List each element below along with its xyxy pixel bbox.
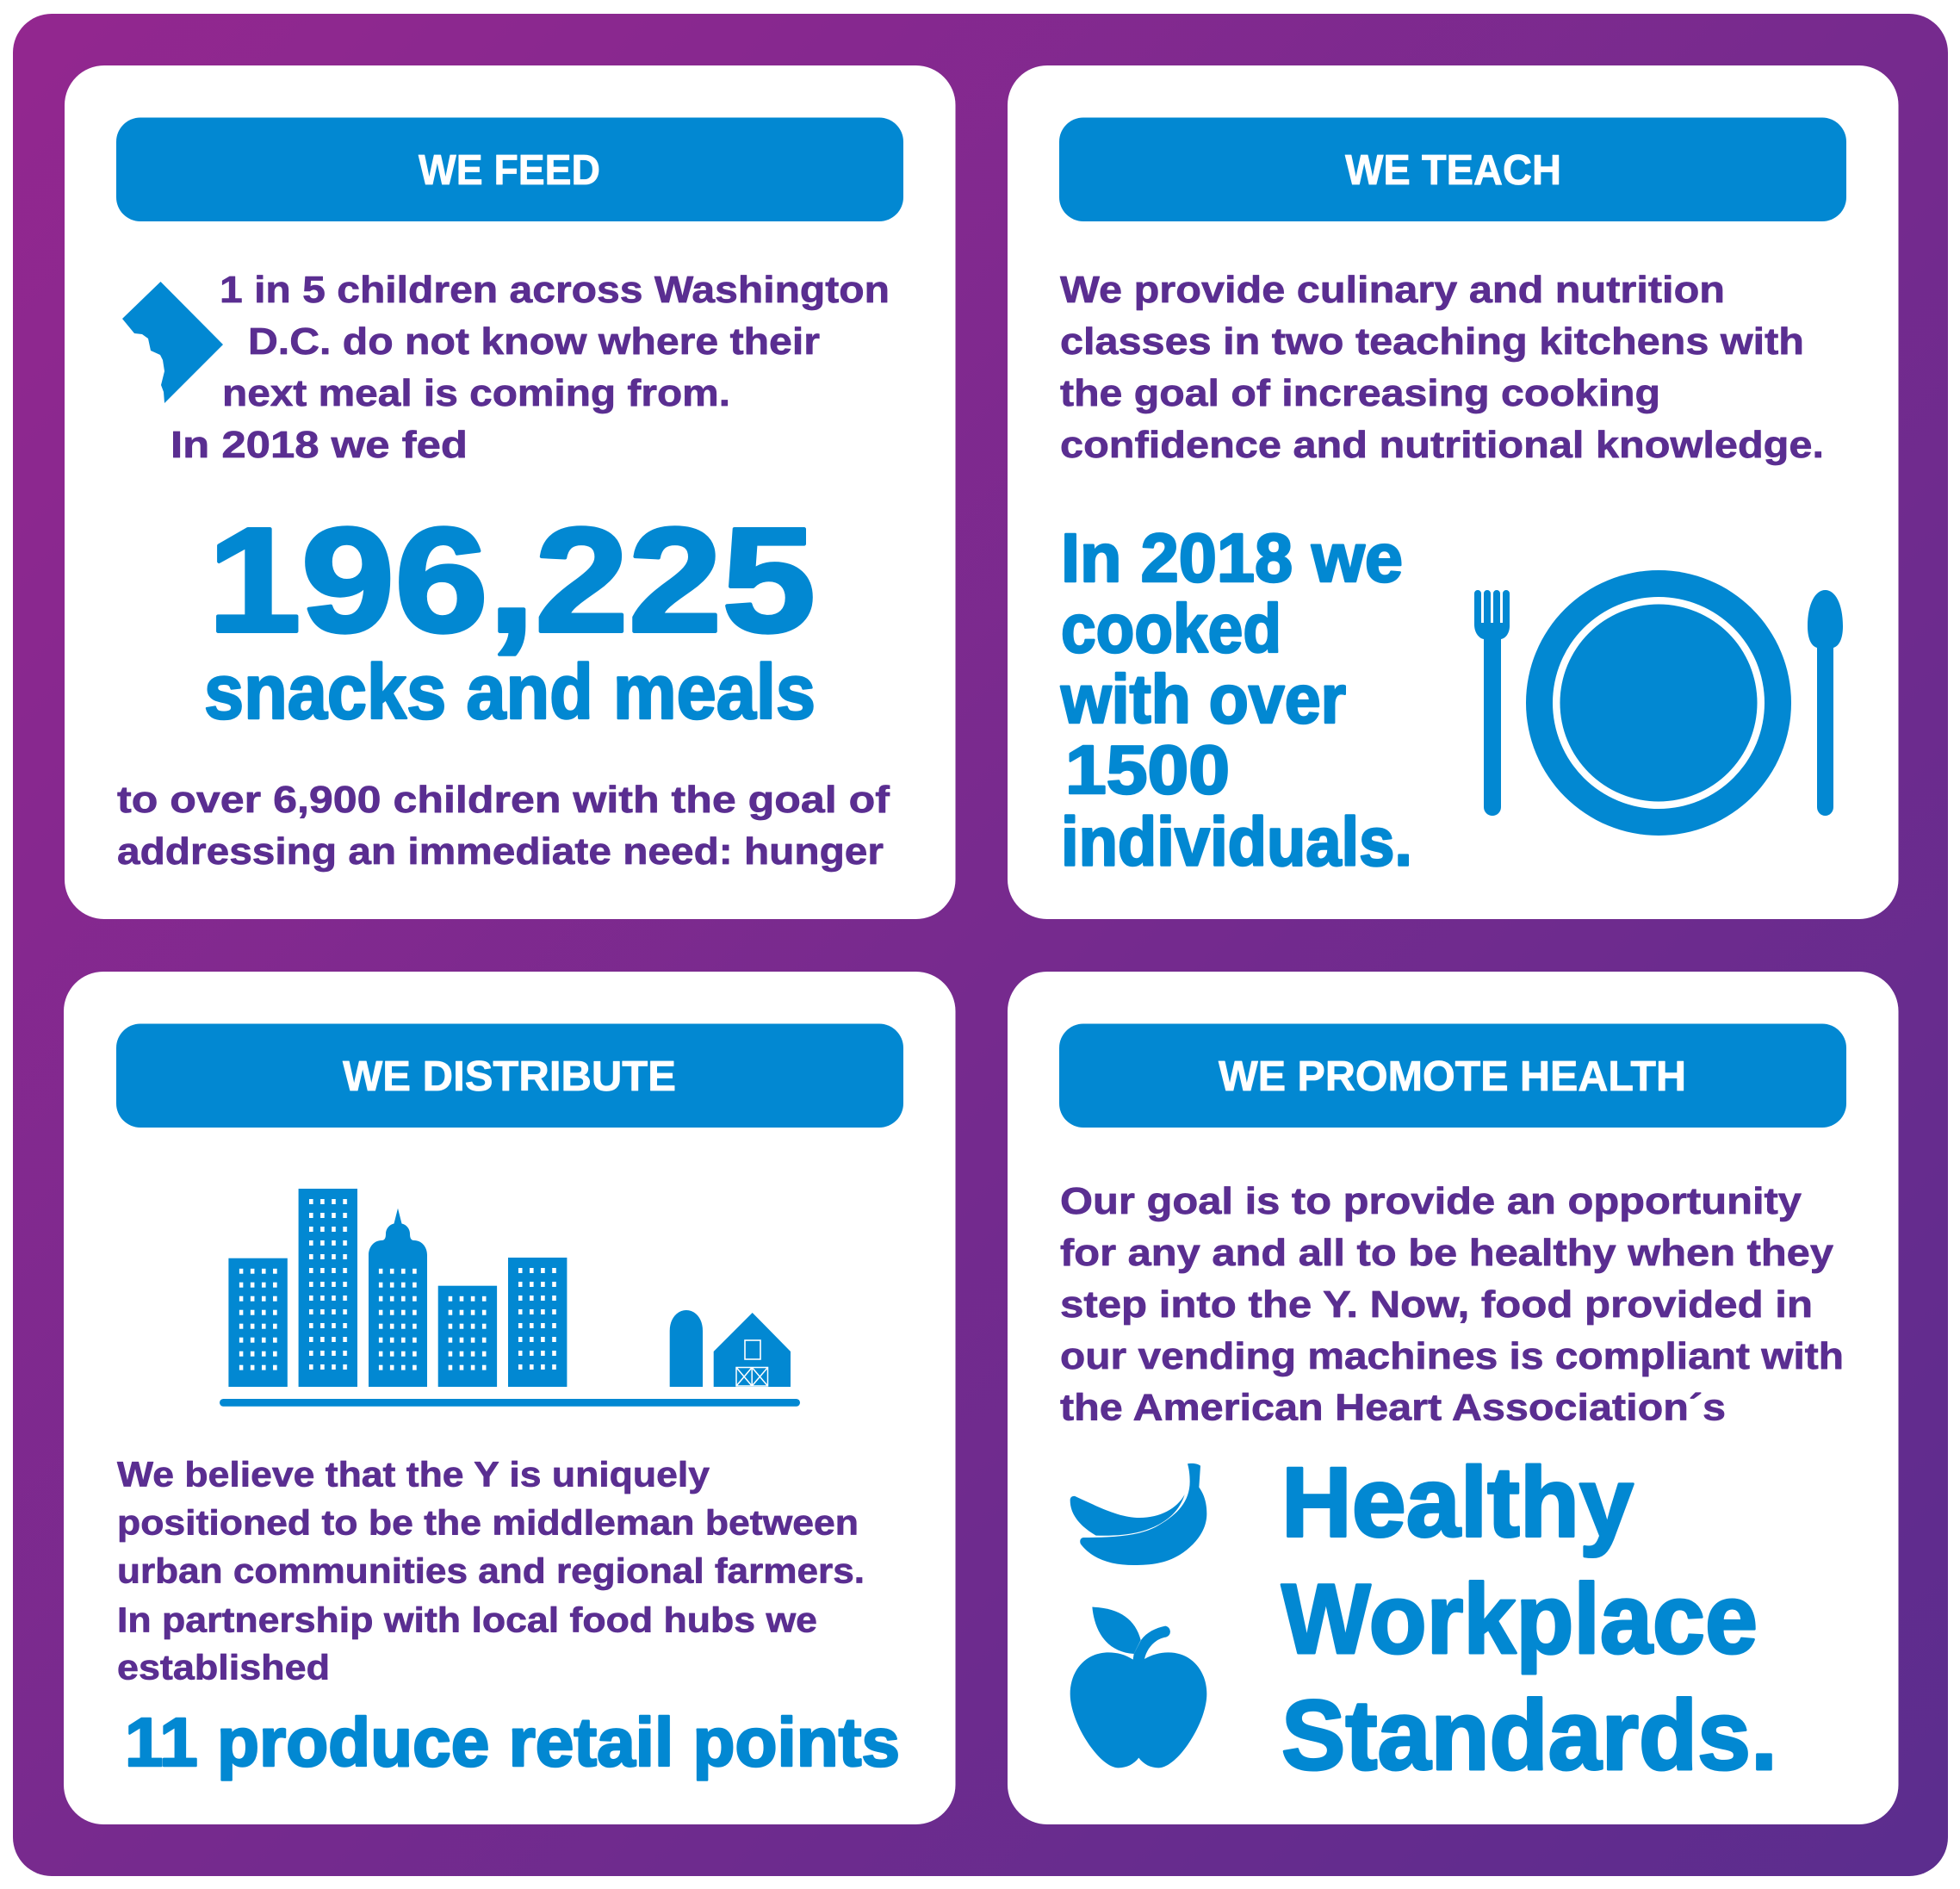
- text block: culinary classes: We provide culinary and nutrition: [1060, 269, 1725, 311]
- text block: vending goal: Our goal is to provide an opportunity: [1060, 1180, 1802, 1222]
- text block: children statistic: 1 in 5 children across Washington: [220, 269, 890, 311]
- icon: fork: [1474, 590, 1510, 816]
- text block: vending goal: step into the Y. Now, food provided in: [1060, 1283, 1813, 1326]
- big statement: individuals cooked with: 1500: [1065, 731, 1230, 808]
- big number: snacks and meals: snacks and meals: [204, 649, 816, 736]
- panel: we distribute: [64, 972, 956, 1824]
- text block: middleman: positioned to be the middleman between: [117, 1502, 859, 1542]
- text block: children statistic: [171, 269, 890, 466]
- big statement: healthy workplace standards: Healthy: [1281, 1447, 1634, 1557]
- text block: vending goal: our vending machines is compliant with: [1060, 1335, 1844, 1377]
- text block: vending goal: [1060, 1180, 1844, 1428]
- text block: vending goal: for any and all to be healthy when they: [1060, 1232, 1834, 1274]
- text block: culinary classes: [1060, 269, 1824, 466]
- text block: culinary classes: the goal of increasing cooking: [1060, 372, 1660, 414]
- heading: we promote health: WE PROMOTE HEALTH: [1219, 1053, 1686, 1100]
- heading: we teach: WE TEACH: [1345, 147, 1561, 194]
- text block: children statistic: In 2018 we fed: [171, 424, 468, 466]
- icon: washington dc map: [122, 282, 223, 403]
- icon: apple: [1070, 1607, 1206, 1768]
- text block: children reached: [117, 779, 890, 873]
- heading: we teach: [1059, 117, 1846, 221]
- heading: we feed: [116, 117, 903, 221]
- panel: we teach: [1008, 65, 1898, 919]
- text block: middleman: established: [117, 1647, 330, 1687]
- text block: middleman: urban communities and regional farmers.: [117, 1550, 865, 1590]
- text block: culinary classes: classes in two teaching kitchens with: [1060, 320, 1804, 363]
- big statement: individuals cooked with: cooked: [1061, 590, 1281, 667]
- icon: spoon: [1808, 590, 1843, 816]
- big number: snacks and meals: 196,225: [208, 496, 816, 663]
- big statement: individuals cooked with: In 2018 we: [1061, 519, 1403, 596]
- big statement: individuals cooked with: individuals.: [1061, 803, 1412, 880]
- big statement: healthy workplace standards: Standards.: [1281, 1681, 1777, 1791]
- text block: children reached: addressing an immediate need: hunger: [117, 830, 884, 873]
- text block: vending goal: the American Heart Association´s: [1060, 1387, 1726, 1428]
- text block: children reached: to over 6,900 children with the goal of: [117, 779, 890, 821]
- big statement: healthy workplace standards: Workplace: [1281, 1564, 1758, 1675]
- text block: children statistic: next meal is coming from.: [222, 372, 730, 414]
- big statement: healthy workplace standards: [1281, 1447, 1777, 1791]
- heading: we feed: WE FEED: [419, 147, 600, 194]
- text block: middleman: We believe that the Y is uniquely: [117, 1454, 710, 1494]
- text block: culinary classes: confidence and nutritional knowledge.: [1060, 424, 1824, 466]
- panel: we feed: [65, 65, 956, 919]
- text block: children statistic: D.C. do not know where their: [248, 320, 820, 363]
- text block: middleman: In partnership with local food hubs we: [117, 1600, 817, 1640]
- big statement: individuals cooked with: [1060, 519, 1412, 880]
- heading: we distribute: [116, 1023, 903, 1128]
- big number: snacks and meals: [204, 496, 816, 736]
- heading: we distribute: WE DISTRIBUTE: [343, 1053, 676, 1100]
- icon: plate: [1526, 570, 1791, 836]
- text block: middleman: [117, 1454, 865, 1687]
- icon: bananas: [1070, 1463, 1206, 1565]
- icon: city skyline and farm: [220, 1189, 800, 1407]
- panel: we promote health: [1008, 972, 1898, 1824]
- big statement: individuals cooked with: with over: [1060, 661, 1346, 737]
- heading: we promote health: [1059, 1023, 1846, 1128]
- big statement: retail points: 11 produce retail points: [125, 1704, 900, 1780]
